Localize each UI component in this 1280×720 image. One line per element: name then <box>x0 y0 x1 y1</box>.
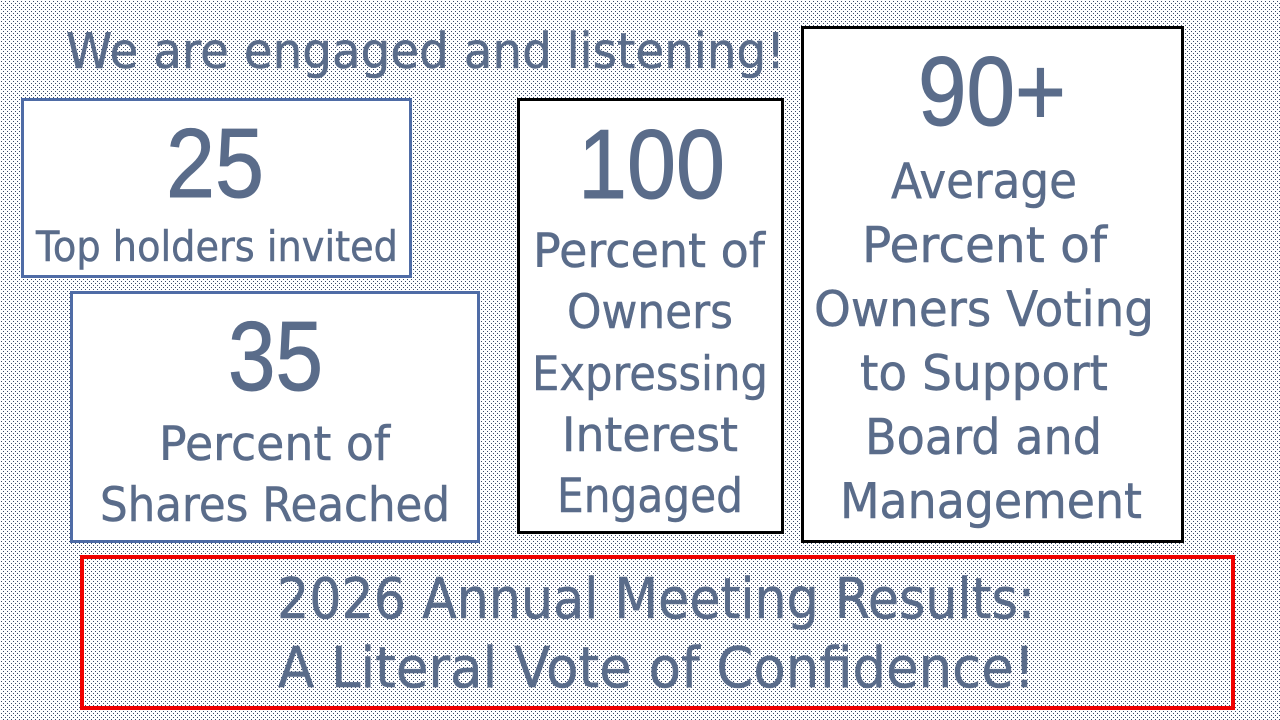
label: top holders invited: Top holders invited <box>35 222 398 271</box>
label: percent of owners expressing interest engaged: Expressing <box>532 347 768 402</box>
stat: 100: 100 <box>578 109 725 219</box>
label: average percent of owners voting to support board and management: Board and <box>865 409 1102 466</box>
label: average percent of owners voting to support board and management: to Support <box>860 345 1108 402</box>
label: average percent of owners voting to support board and management <box>814 153 1154 530</box>
stat: 35: 35 <box>228 301 323 411</box>
label: percent of owners expressing interest engaged: Interest <box>562 408 738 463</box>
label: percent of owners expressing interest engaged: Owners <box>567 285 733 340</box>
panel: average percent of owners voting to support board and management <box>802 28 1182 542</box>
label: percent of owners expressing interest engaged: Percent of <box>533 224 766 279</box>
panel: percent of owners expressing interest engaged <box>518 100 782 532</box>
callout text line 1: 2026 Annual Meeting Results: <box>277 567 1035 632</box>
stat: 25: 25 <box>166 108 264 218</box>
label: percent of owners expressing interest engaged: Engaged <box>557 469 743 524</box>
callout text line 2: A Literal Vote of Confidence! <box>278 636 1035 701</box>
title: We are engaged and listening! <box>66 23 785 80</box>
panel: percent of shares reached <box>72 292 478 542</box>
callout: 2026 annual meeting results <box>82 557 1233 708</box>
label: average percent of owners voting to support board and management: Owners Voting <box>814 281 1154 338</box>
stat: 90+: 90+ <box>918 36 1066 146</box>
label: average percent of owners voting to support board and management: Percent of <box>862 217 1109 274</box>
label: percent of shares reached <box>100 417 450 533</box>
panel: top holders invited <box>22 100 410 276</box>
label: average percent of owners voting to support board and management: Average <box>891 153 1077 210</box>
label: percent of owners expressing interest engaged <box>532 224 768 524</box>
label: average percent of owners voting to support board and management: Management <box>840 473 1142 530</box>
label: percent of shares reached: Percent of <box>159 417 391 472</box>
label: percent of shares reached: Shares Reached <box>100 478 450 533</box>
